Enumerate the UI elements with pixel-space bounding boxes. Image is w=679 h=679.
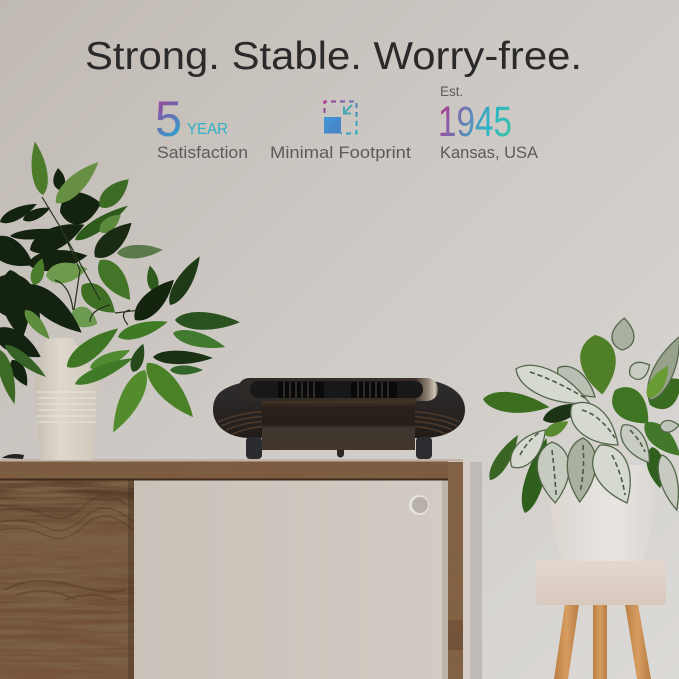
top board (0, 459, 463, 480)
stems (42, 197, 140, 325)
leaf: centre greens (44, 259, 89, 286)
leaf: lower dark (170, 365, 203, 375)
door (134, 480, 442, 679)
wood panel (0, 480, 134, 679)
small object on shelf (2, 454, 24, 459)
leaf: long mid (116, 315, 170, 344)
feature: 5 year satisfaction: Satisfaction (157, 144, 248, 162)
feature: est. 1945 Kansas: Est. (440, 84, 463, 99)
device grille left (218, 411, 272, 434)
green accent leaves (542, 362, 674, 440)
leaf: hanging greens (139, 356, 201, 424)
silver leaf markings (520, 372, 645, 495)
feature: 5 year satisfaction: YEAR (187, 121, 228, 138)
door knob (409, 495, 429, 515)
feature: minimal footprint: Minimal Footprint (270, 144, 411, 162)
vase (35, 338, 98, 460)
feature: est. 1945 Kansas: 1945 (438, 98, 512, 146)
green leaves (482, 368, 679, 516)
device louvers (278, 382, 397, 398)
feature: 5 year satisfaction (155, 91, 248, 162)
device: heater/fan (213, 378, 465, 459)
leaf: mid green (72, 200, 131, 245)
vase ribs (37, 392, 96, 422)
feature: est. 1945 Kansas: Kansas, USA (440, 144, 538, 162)
leaf: top (27, 140, 50, 196)
silver leaves (504, 317, 679, 512)
stool top (536, 560, 666, 605)
device grille right (402, 411, 460, 434)
device lower panel (262, 400, 415, 450)
big green leaf (577, 333, 620, 397)
dark foliage mass (0, 168, 104, 389)
feature: 5 year satisfaction: 5 (155, 91, 182, 147)
leaf: upper right bright (50, 156, 105, 209)
stool legs (554, 604, 651, 679)
icon: footprint shrink (324, 102, 356, 134)
left plant and vase (0, 140, 240, 460)
device body (213, 379, 465, 438)
device centre knob (337, 450, 344, 458)
feature: minimal footprint (270, 102, 411, 162)
device slot (250, 381, 423, 398)
leaf: stalk node (127, 342, 149, 374)
right plant on stool (482, 317, 679, 679)
device top housing (238, 378, 438, 401)
leaf: pale grey (117, 243, 163, 260)
device left foot (246, 437, 262, 459)
cabinet (0, 459, 482, 679)
leaf: lower left (0, 348, 21, 406)
leaf: upper right (94, 173, 135, 213)
device right foot (416, 437, 432, 459)
leaf: dark right spray (144, 264, 160, 293)
pot (550, 465, 655, 561)
title: Strong. Stable. Worry-free. (85, 35, 582, 78)
leaf: dark (88, 216, 138, 264)
leaf: dark hanging (17, 276, 89, 342)
side board (448, 462, 463, 679)
feature: est. 1945 Kansas (438, 84, 538, 162)
